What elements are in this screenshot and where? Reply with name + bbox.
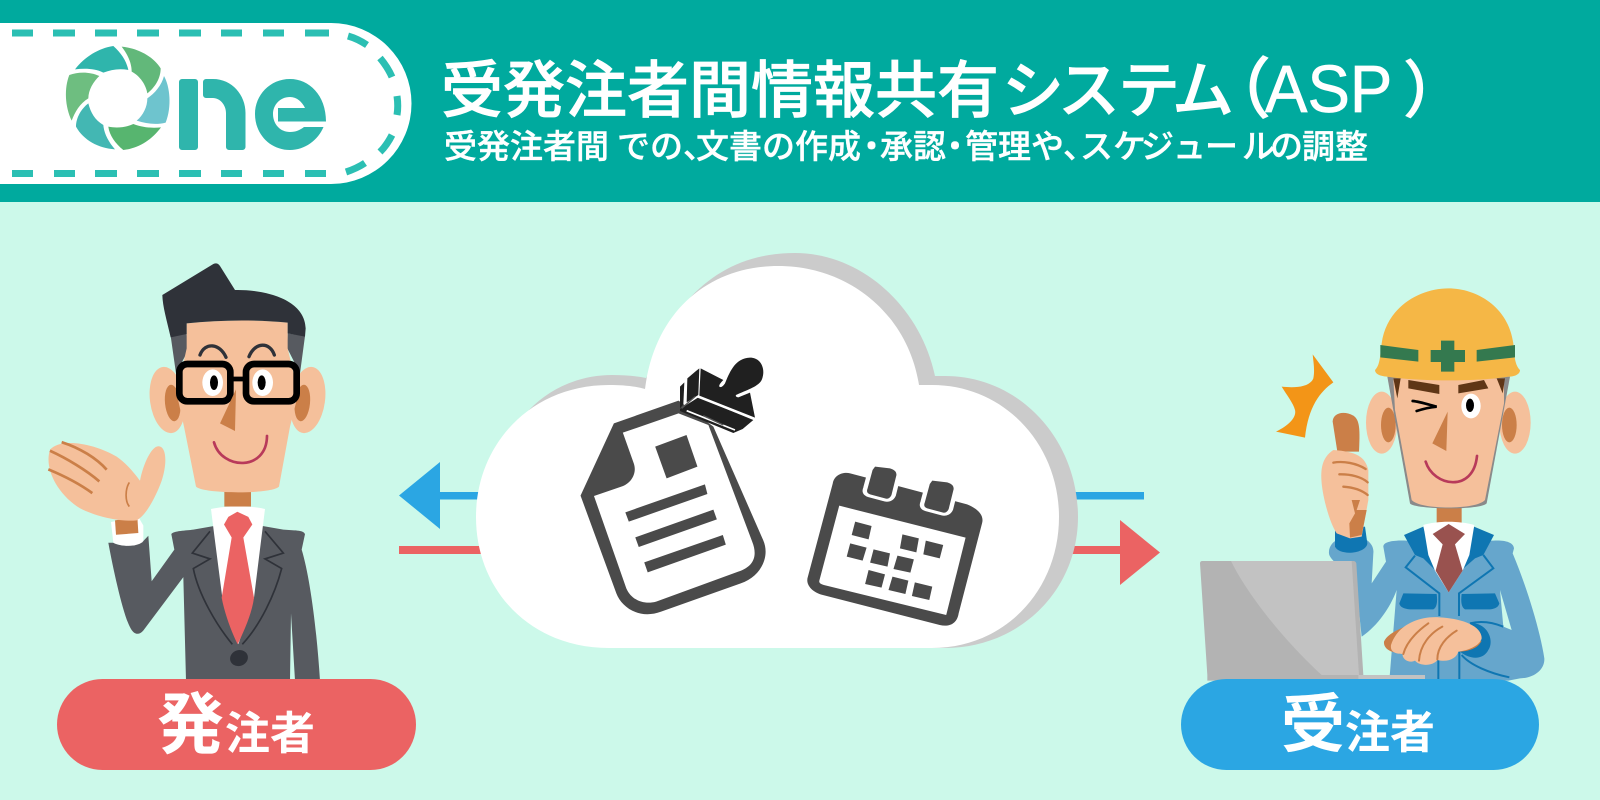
lower cuff and hand	[1384, 617, 1491, 665]
client label text: 発	[157, 688, 224, 763]
subtitle: 調整	[1302, 128, 1368, 165]
smile	[1426, 456, 1477, 482]
subtitle: ュ	[1173, 128, 1206, 165]
title: シ	[1002, 57, 1064, 126]
client label text: 注者	[225, 708, 315, 759]
subtitle: 管理や、	[965, 128, 1096, 165]
client label pill	[57, 679, 416, 770]
hair	[162, 263, 306, 337]
underarm gap	[1500, 590, 1512, 630]
icon: stamp	[680, 358, 763, 433]
seams	[1438, 622, 1509, 681]
arrow: red, to contractor	[399, 520, 1160, 585]
character: contractor with helmet	[1200, 288, 1544, 681]
title: ）	[1403, 57, 1465, 126]
eyebrows	[1408, 380, 1488, 394]
character: client in suit	[48, 263, 329, 680]
subtitle: での、	[617, 128, 716, 165]
pockets	[1399, 593, 1499, 609]
badge dashed stitching	[12, 33, 398, 174]
title	[441, 52, 1465, 126]
icon: document	[581, 401, 766, 614]
logo: letter e	[255, 79, 326, 150]
title: テ	[1118, 57, 1180, 126]
subtitle: ー	[1205, 128, 1238, 165]
arrow: blue, to client	[399, 462, 1144, 529]
contractor label text: 受	[1281, 689, 1345, 761]
logo badge	[0, 23, 412, 184]
winking eye	[1413, 401, 1437, 411]
face	[177, 320, 298, 492]
contractor label pill	[1181, 679, 1539, 770]
contractor label text: 注者	[1345, 707, 1435, 758]
title: （	[1205, 52, 1271, 126]
subtitle: 受発注者間	[444, 128, 609, 165]
eyes	[202, 369, 273, 396]
neck, collar and jacket details	[1399, 507, 1512, 681]
cloud	[476, 253, 1078, 648]
sparkle	[1276, 354, 1333, 438]
title: ス	[1058, 57, 1120, 126]
collar	[1404, 527, 1494, 570]
subtitle: 承認	[880, 128, 946, 165]
subtitle: ジ	[1141, 128, 1174, 165]
subtitle: ・	[855, 128, 888, 165]
raised hand	[48, 442, 165, 546]
subtitle: ル	[1242, 128, 1275, 165]
header band	[0, 0, 1600, 202]
head	[146, 263, 329, 492]
glasses	[179, 364, 297, 401]
subtitle: スケ	[1080, 128, 1146, 165]
laptop	[1200, 561, 1425, 681]
subtitle: 文書の作成	[696, 128, 861, 165]
sideburns	[1393, 378, 1505, 398]
nose	[220, 389, 236, 431]
helmet	[1375, 288, 1520, 380]
chin strap	[1387, 377, 1510, 508]
title: ム	[1172, 57, 1234, 126]
shirt	[1423, 522, 1474, 592]
jacket	[1329, 540, 1544, 681]
nose	[1432, 412, 1448, 451]
title: 受発注者間情報共有	[441, 57, 999, 126]
icon: calendar	[807, 467, 983, 626]
ears	[146, 365, 329, 435]
eyebrows	[200, 345, 274, 357]
tie	[1433, 524, 1465, 592]
smile	[214, 436, 267, 463]
face	[1393, 378, 1504, 507]
ears	[1366, 392, 1531, 454]
thumbs-up hand	[1321, 413, 1368, 538]
logo: pinwheel ring	[66, 46, 170, 150]
raised cuff	[1335, 527, 1367, 553]
subtitle: ・	[938, 128, 972, 165]
suit body	[108, 491, 320, 680]
side hair	[171, 333, 305, 373]
subtitle: の	[1270, 128, 1303, 165]
open eye	[1461, 394, 1481, 418]
logo: letter n	[179, 79, 246, 150]
title: ASP	[1265, 52, 1392, 126]
